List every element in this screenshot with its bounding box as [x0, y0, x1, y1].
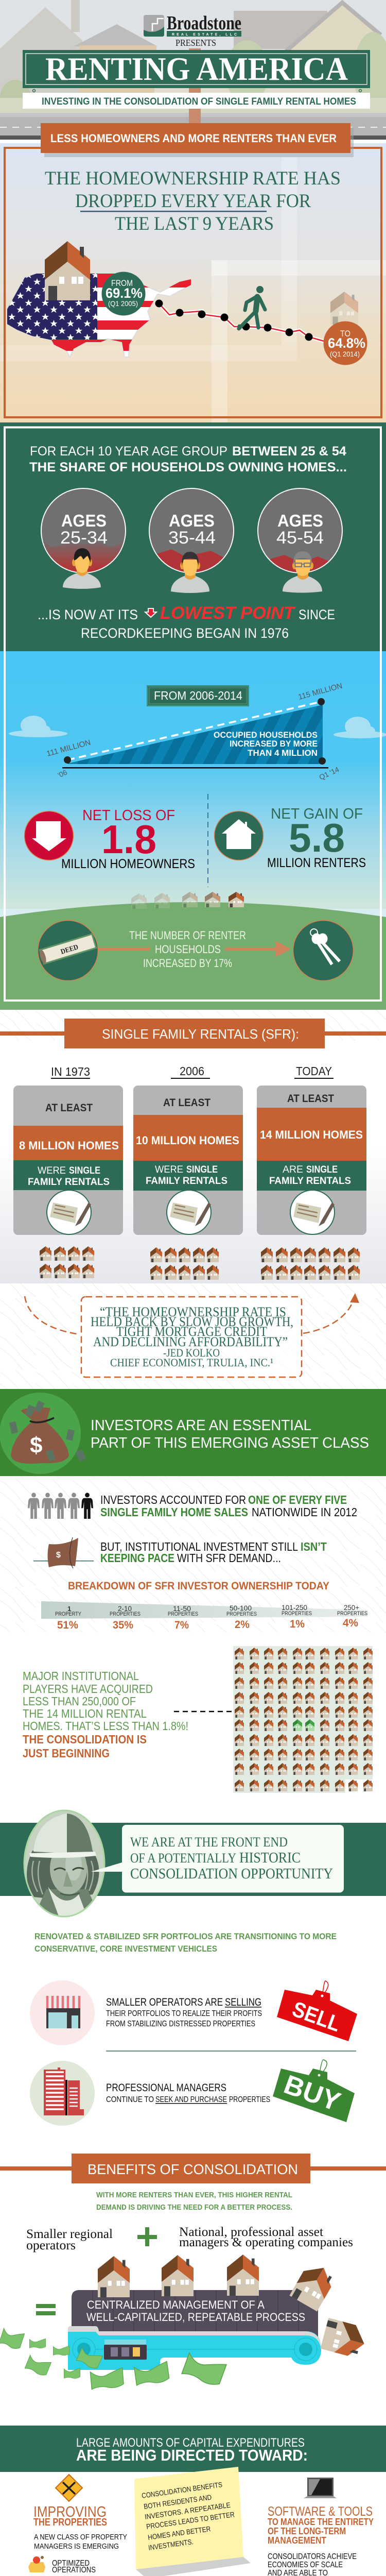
text: lowest point: SINCE — [299, 607, 335, 622]
title sign — [23, 50, 370, 92]
chart: occupied households wedge: 111 MILLION — [46, 738, 92, 758]
icon: sell tag — [277, 1981, 357, 2041]
icon: deed — [38, 920, 98, 981]
stat: net gain: 5.8 — [289, 815, 345, 860]
text: age group intro: THE SHARE OF HOUSEHOLDS OWNING HOMES... — [29, 460, 347, 474]
card: today: 14 MILLION HOMES — [260, 1128, 363, 1141]
heading: SFR: SINGLE FAMILY RENTALS (SFR): — [102, 1026, 299, 1042]
text: renter households — [129, 929, 246, 970]
callout: to 64.8%: TO — [340, 329, 350, 338]
chart: occupied households wedge: 115 MILLION — [297, 682, 343, 702]
heading: homeownership: DROPPED EVERY YEAR FOR — [75, 191, 311, 212]
icon: keys — [293, 920, 353, 981]
text: lowest point: RECORDKEEPING BEGAN IN 1976 — [81, 625, 289, 641]
note: sticky — [134, 2467, 251, 2576]
chart: ownership breakdown: PROPERTIES — [282, 1611, 312, 1617]
card: 2006: FAMILY RENTALS — [146, 1176, 227, 1187]
icon: money bag — [9, 1400, 86, 1464]
heading: breakdown: BREAKDOWN OF SFR INVESTOR OWNERSHIP TODAY — [68, 1580, 329, 1592]
column: software and tools — [268, 2478, 374, 2576]
icon: sell tag: SELL — [289, 1996, 344, 2036]
card: 2006 — [133, 1064, 243, 1235]
card: 2006: AT LEAST — [163, 1097, 210, 1109]
icon: plus — [137, 2227, 157, 2246]
text: national managers: National, professional asset — [179, 2225, 323, 2239]
icon: squeezed money bag — [33, 1537, 94, 1568]
card: today: SINGLE — [306, 1164, 338, 1175]
chart: ownership breakdown: 250+ — [344, 1603, 359, 1612]
icon: tools sign — [56, 2475, 82, 2501]
column: improving the properties: OPTIMIZED — [52, 2559, 90, 2568]
column: software and tools: CONSOLIDATORS ACHIEVE — [268, 2552, 357, 2561]
row: smaller operators selling: SMALLER OPERATORS ARE — [106, 1996, 223, 2008]
background: guilloche — [0, 1010, 386, 2576]
card: today — [257, 1064, 366, 1235]
note: sticky: BOTH RESIDENTS AND — [143, 2493, 212, 2511]
column: software and tools: MANAGEMENT — [268, 2535, 327, 2546]
chart: occupied households wedge: THAN 4 MILLION — [248, 749, 318, 758]
icons: 10 houses — [150, 1247, 219, 1280]
heading: SFR — [0, 1019, 386, 1048]
chart: ownership breakdown: 51% — [57, 1619, 78, 1631]
text: major institutional players: THE 14 MILLION RENTAL — [23, 1707, 147, 1720]
chart: ages 45-54 — [258, 488, 342, 574]
logo: Broadstone top — [144, 12, 241, 37]
text: isn't keeping pace: BUT, INSTITUTIONAL INVESTMENT STILL — [100, 1540, 298, 1553]
panel: single family rentals — [0, 1019, 386, 1280]
icon: Franklin with hard hat — [23, 1809, 106, 1918]
panel: homeownership rate — [0, 143, 386, 422]
chart: ownership breakdown: 2% — [235, 1619, 250, 1631]
logo: Broadstone top: REAL ESTATE, LLC — [172, 33, 237, 37]
arrow: renter households — [98, 941, 291, 957]
chart: ages 35-44: AGES — [169, 511, 215, 530]
subtitle strip — [23, 93, 370, 109]
callout: from 69.1%: 69.1% — [106, 285, 143, 301]
card: 2006: 10 MILLION HOMES — [136, 1134, 239, 1147]
chart: ownership breakdown: 11-50 — [173, 1604, 191, 1613]
speech bubble: WE ARE AT THE FRONT END — [130, 1835, 288, 1850]
icon: office building — [30, 2061, 95, 2126]
icon: conveyor houses — [98, 2255, 369, 2359]
logo: Broadstone top: Broadstone — [167, 12, 241, 34]
arrow: right dashed curve — [303, 1293, 359, 1333]
note: sticky: PROCESS LEADS TO BETTER — [146, 2510, 235, 2531]
chart: occupied households wedge: Q1 '14 — [318, 765, 340, 782]
icon: deed: DEED — [60, 943, 79, 956]
icon: equals — [36, 2304, 56, 2315]
chart: ownership breakdown: 1 — [67, 1605, 71, 1613]
row: professional managers buying — [30, 2060, 355, 2126]
text: one of every five: SINGLE FAMILY HOME SALES — [100, 1505, 248, 1519]
chart: occupied households wedge: INCREASED BY MORE — [230, 739, 318, 749]
card: today: TODAY — [296, 1064, 332, 1078]
icon: down arrow — [145, 608, 156, 617]
row: professional managers buying: PROFESSIONAL MANAGERS — [106, 2082, 226, 2094]
text: major institutional players: LESS THAN 250,000 OF — [23, 1694, 136, 1708]
chart: ages 25-34: AGES — [61, 511, 107, 530]
text: major institutional players — [23, 1669, 188, 1760]
card: 1973: 8 MILLION HOMES — [19, 1139, 119, 1152]
header: less homeowners — [41, 123, 354, 157]
road — [0, 113, 386, 140]
icon: squeezed money bag: $ — [56, 1551, 61, 1560]
icons: flying money — [0, 2327, 226, 2389]
column: improving the properties: A NEW CLASS OF PROPERTY — [34, 2533, 127, 2541]
stat: net loss: 1.8 — [101, 817, 156, 862]
text: major institutional players: MAJOR INSTITUTIONAL — [23, 1669, 139, 1683]
chart: ownership breakdown: 1% — [290, 1618, 305, 1630]
icon: five people — [28, 1493, 93, 1519]
icon: store — [30, 1980, 95, 2045]
callout: quote — [25, 1293, 359, 1377]
text: major institutional players: JUST BEGINNING — [23, 1747, 110, 1760]
speech bubble: HISTORIC — [239, 1850, 301, 1866]
text: renter households: THE NUMBER OF RENTER — [129, 929, 246, 942]
row: professional managers buying: PROPERTIES — [229, 2095, 270, 2104]
note: sticky: INVESTORS. A REPEATABLE — [144, 2501, 231, 2521]
frame: white border — [5, 428, 381, 1001]
speech bubble: CONSOLIDATION OPPORTUNITY — [130, 1866, 333, 1882]
callout: quote: TIGHT MORTGAGE CREDIT — [116, 1324, 267, 1339]
callout: to 64.8% — [323, 321, 367, 365]
icon: person young — [63, 548, 101, 589]
column: improving the properties — [28, 2475, 127, 2576]
icon: laptop — [304, 2478, 337, 2498]
text: one of every five — [100, 1493, 357, 1519]
arrow: left dashed curve — [25, 1296, 80, 1334]
banner: investors essential: PART OF THIS EMERGING ASSET CLASS — [91, 1435, 369, 1451]
chart: ownership breakdown: 4% — [343, 1617, 358, 1629]
chart: occupied households wedge: OCCUPIED HOUSEHOLDS — [214, 731, 318, 740]
stat: net loss — [25, 807, 195, 871]
banner: capital expenditures: LARGE AMOUNTS OF CAPITAL EXPENDITURES — [76, 2436, 305, 2450]
chart: falling rate line — [155, 300, 329, 343]
chart: ages 45-54: 45-54 — [276, 528, 324, 548]
chart: ownership breakdown: PROPERTIES — [337, 1611, 367, 1617]
banner: capital expenditures — [0, 2426, 386, 2472]
chart: ownership breakdown: PROPERTIES — [168, 1611, 198, 1617]
column: improving the properties: IMPROVING — [33, 2504, 107, 2520]
chart: occupied households wedge: '06 — [57, 768, 68, 779]
chart: ages 35-44: 35-44 — [168, 528, 216, 548]
chart: ownership breakdown: PROPERTY — [55, 1611, 82, 1617]
card: 2006: SINGLE — [186, 1164, 218, 1175]
subtitle strip: INVESTING IN THE CONSOLIDATION OF SINGLE FAMILY RENTAL HOMES — [42, 96, 356, 107]
icon: person older — [283, 551, 322, 592]
chart: ages 45-54: AGES — [277, 511, 323, 530]
panel: households chart on sky — [0, 651, 386, 1010]
text: major institutional players: PLAYERS HAVE ACQUIRED — [23, 1682, 153, 1696]
text: age group intro: BETWEEN 25 & 54 — [232, 444, 346, 459]
text: isn't keeping pace: KEEPING PACE — [100, 1551, 174, 1565]
heading: homeownership — [45, 168, 341, 234]
map: US flag — [0, 271, 195, 357]
card: 1973: IN 1973 — [51, 1065, 90, 1078]
text: renter households: INCREASED BY 17% — [143, 957, 232, 970]
callout: quote: HELD BACK BY SLOW JOB GROWTH, — [91, 1314, 293, 1329]
chart: ownership breakdown: 7% — [174, 1619, 189, 1631]
card: 1973: FAMILY RENTALS — [28, 1177, 110, 1188]
stat: net loss: NET LOSS OF — [82, 807, 175, 824]
card: 1973: AT LEAST — [45, 1102, 93, 1114]
banner: capital expenditures: ARE BEING DIRECTED TOWARD: — [76, 2446, 308, 2464]
column: improving the properties: THE PROPERTIES — [33, 2517, 107, 2528]
chart: occupied households wedge — [46, 682, 343, 782]
text: renovated portfolios — [34, 1931, 337, 1954]
card: 1973: SINGLE — [69, 1165, 100, 1176]
stat: net gain: NET GAIN OF — [271, 806, 363, 822]
text: national managers: managers & operating companies — [179, 2235, 353, 2249]
column: software and tools: ECONOMIES OF SCALE — [268, 2561, 343, 2569]
card: 2006: 2006 — [180, 1064, 204, 1078]
card: 1973: WERE — [38, 1165, 66, 1176]
text: national managers — [179, 2225, 353, 2249]
text: major institutional players: HOMES. THAT’S LESS THAN 1.8%! — [23, 1719, 188, 1733]
text: isn't keeping pace — [100, 1540, 327, 1565]
callout: quote: CHIEF ECONOMIST, TRULIA, INC.¹ — [110, 1356, 273, 1369]
icon: money bag: $ — [30, 1433, 42, 1458]
label: from 2006-2014: FROM 2006-2014 — [154, 689, 242, 702]
diagram: conveyor belt: WELL-CAPITALIZED, REPEATABLE PROCESS — [86, 2311, 305, 2324]
panel: hero neighborhood scene — [0, 0, 386, 116]
text: smaller regional operators: operators — [26, 2239, 76, 2252]
text: higher rental demand — [96, 2191, 292, 2212]
row: smaller operators selling: THEIR PORTFOLIOS TO REALIZE THEIR PROFITS — [106, 2009, 262, 2018]
text: renovated portfolios: RENOVATED & STABILIZED SFR PORTFOLIOS ARE TRANSITIONING TO MORE — [34, 1931, 337, 1941]
chart: ownership breakdown: 2-10 — [118, 1604, 132, 1613]
callout: from 69.1%: (Q1 2005) — [108, 299, 138, 308]
label: from 2006-2014 — [147, 686, 248, 706]
banner: investors essential: INVESTORS ARE AN ESSENTIAL — [91, 1417, 311, 1434]
text: one of every five: NATIONWIDE IN 2012 — [252, 1505, 357, 1519]
text: lowest point: LOWEST POINT — [160, 603, 296, 623]
icon: person middle-aged — [171, 552, 209, 593]
row: smaller operators selling: SELLING — [225, 1996, 261, 2008]
icon: faded house — [330, 292, 358, 325]
heading: homeownership: THE LAST 9 YEARS — [115, 213, 274, 234]
card: today: ARE — [283, 1164, 303, 1175]
chart: ages 25-34 — [41, 488, 126, 574]
column: software and tools: OF THE LONG-TERM — [268, 2526, 346, 2536]
icons: 8 houses — [40, 1246, 94, 1278]
callout: from 69.1%: FROM — [111, 278, 133, 288]
row: smaller operators selling — [30, 1980, 357, 2045]
card: 1973 — [13, 1065, 123, 1235]
text: smaller regional operators: Smaller regional — [26, 2227, 113, 2241]
text: isn't keeping pace: WITH SFR DEMAND... — [177, 1551, 281, 1565]
text: higher rental demand: WITH MORE RENTERS THAN EVER, THIS HIGHER RENTAL — [96, 2191, 292, 2199]
note: sticky: INVESTMENTS. — [148, 2537, 194, 2552]
icon: buy tag — [273, 2060, 355, 2122]
pointer: dashed line — [174, 1711, 233, 1712]
text: lowest point — [38, 603, 335, 641]
text: renovated portfolios: CONSERVATIVE, CORE INVESTMENT VEHICLES — [34, 1944, 217, 1954]
text: renter households: HOUSEHOLDS — [155, 943, 221, 956]
callout: to 64.8%: 64.8% — [328, 335, 365, 351]
chart: ownership breakdown: 35% — [113, 1619, 133, 1631]
stat: net gain — [214, 806, 366, 870]
sign post — [189, 48, 201, 124]
column: improving the properties: MANAGERS IS EMERGING — [34, 2542, 119, 2551]
text: one of every five: INVESTORS ACCOUNTED FOR — [100, 1493, 246, 1506]
row: professional managers buying: CONTINUE TO — [106, 2095, 154, 2104]
callout: to 64.8%: (Q1 2014) — [330, 350, 360, 358]
panel: age groups — [0, 422, 386, 651]
text: smaller regional operators — [26, 2227, 113, 2252]
chart: ownership breakdown: 50-100 — [230, 1604, 252, 1612]
chart: ownership breakdown: PROPERTIES — [110, 1611, 141, 1617]
callout: from 69.1% — [102, 272, 145, 315]
icons: fading houses — [131, 892, 244, 909]
heading: benefits of consolidation: BENEFITS OF CONSOLIDATION — [87, 2161, 298, 2177]
stat: net gain: MILLION RENTERS — [267, 856, 366, 870]
callout: quote: -JED KOLKO — [163, 1346, 220, 1359]
stat: net loss: MILLION HOMEOWNERS — [61, 857, 195, 871]
diagram: conveyor belt — [68, 2290, 321, 2370]
card: today: FAMILY RENTALS — [269, 1176, 351, 1187]
text: major institutional players: THE CONSOLIDATION IS — [23, 1733, 147, 1746]
note: sticky: CONSOLIDATION BENEFITS — [141, 2480, 223, 2500]
icon: house on map — [45, 241, 90, 300]
text: lowest point: ...IS NOW AT ITS — [38, 607, 138, 622]
banner: investors essential — [0, 1389, 386, 1476]
chart: 100 house grid — [233, 1646, 373, 1793]
text: presents: PRESENTS — [176, 38, 216, 48]
banner: front end of consolidation — [0, 1809, 386, 1918]
icons: 14 houses — [261, 1247, 360, 1280]
control panel — [104, 2340, 147, 2360]
text: age group intro — [29, 444, 347, 474]
text: isn't keeping pace: ISN’T — [301, 1540, 327, 1553]
chart: ownership breakdown — [41, 1601, 368, 1631]
column: improving the properties: OPERATIONS — [52, 2566, 96, 2574]
text: higher rental demand: DEMAND IS DRIVING THE NEED FOR A BETTER PROCESS. — [96, 2204, 292, 2212]
text: one of every five: ONE OF EVERY FIVE — [248, 1493, 347, 1506]
chart: ownership breakdown: PROPERTIES — [226, 1611, 257, 1617]
chart: ages 25-34: 25-34 — [60, 528, 108, 548]
chart: ownership breakdown: 101-250 — [282, 1603, 307, 1612]
heading: homeownership: THE HOMEOWNERSHIP RATE HAS — [45, 168, 341, 189]
title: RENTING AMERICA — [45, 50, 348, 87]
speech bubble — [91, 1825, 344, 1893]
card: today: AT LEAST — [287, 1093, 334, 1105]
speech bubble: OF A POTENTIALLY — [130, 1851, 236, 1866]
note: sticky: HOMES AND BETTER — [147, 2524, 211, 2541]
chart: ages 35-44 — [149, 488, 234, 574]
callout: quote: AND DECLINING AFFORDABILITY” — [93, 1334, 288, 1349]
card: 2006: WERE — [155, 1164, 183, 1175]
row: smaller operators selling: FROM STABILIZING DISTRESSED PROPERTIES — [106, 2020, 255, 2028]
icon: buy tag: BUY — [280, 2070, 344, 2117]
icon: walking man — [239, 286, 265, 329]
icon: optimized box — [28, 2556, 45, 2572]
header: less homeowners: LESS HOMEOWNERS AND MORE RENTERS THAN EVER — [50, 132, 337, 145]
row: professional managers buying: SEEK AND PURCHASE — [155, 2095, 227, 2104]
decoration: clouds — [9, 716, 386, 738]
text: age group intro: FOR EACH 10 YEAR AGE GROUP — [30, 444, 227, 459]
callout: quote: “THE HOMEOWNERSHIP RATE IS — [100, 1304, 286, 1319]
heading: benefits of consolidation — [0, 2154, 386, 2183]
diagram: conveyor belt: CENTRALIZED MANAGEMENT OF A — [87, 2298, 265, 2311]
